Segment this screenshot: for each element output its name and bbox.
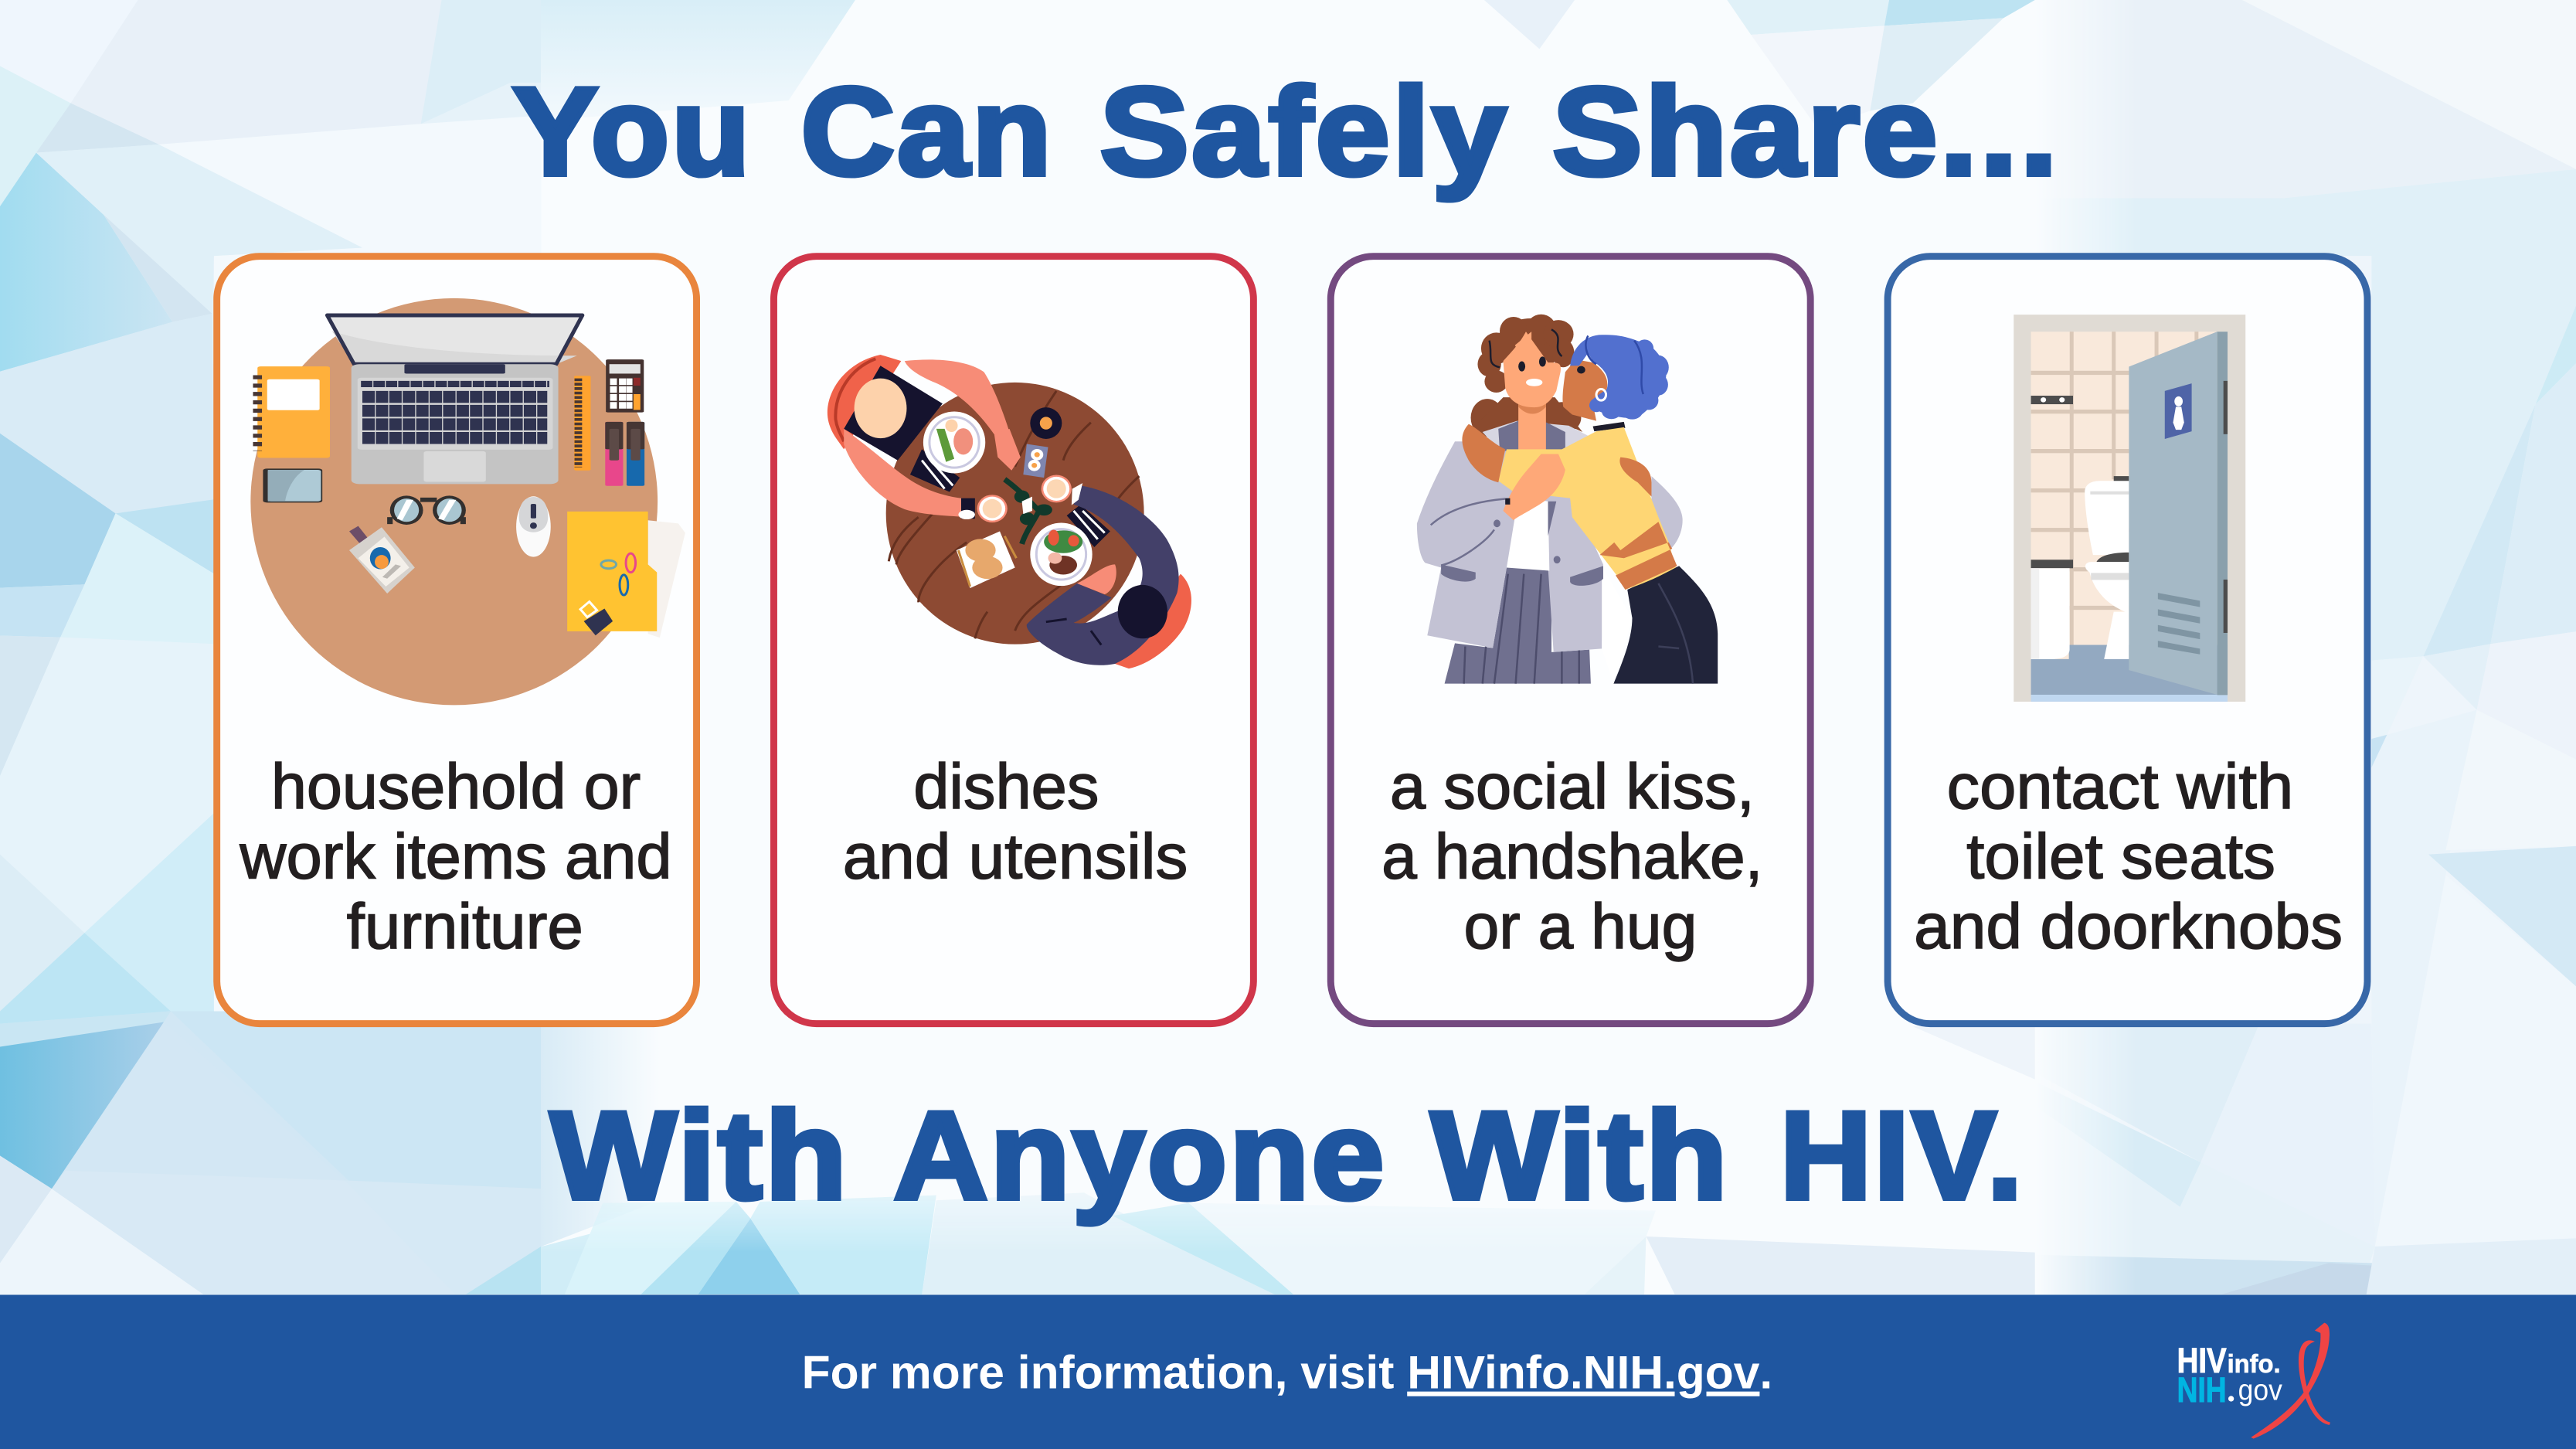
card text bbox=[239, 750, 672, 962]
card text bbox=[1914, 750, 2343, 962]
logo: HIVinfo.NIH.gov with red ribbon: info. bbox=[2228, 1350, 2281, 1379]
illustration: two people at a table bbox=[828, 355, 1191, 668]
title: You Can Safely Share...: Can bbox=[801, 63, 1054, 202]
footer band bbox=[0, 1294, 2576, 1449]
card text bbox=[843, 750, 1188, 892]
card text: dishes bbox=[913, 750, 1099, 822]
title: You Can Safely Share...: Safely bbox=[1100, 63, 1509, 202]
card text: work items and bbox=[239, 820, 672, 892]
title: You Can Safely Share... bbox=[512, 63, 2060, 202]
logo: HIVinfo.NIH.gov with red ribbon: HIV bbox=[2177, 1341, 2227, 1380]
card text: furniture bbox=[347, 890, 583, 962]
logo: HIVinfo.NIH.gov with red ribbon: gov bbox=[2238, 1374, 2283, 1407]
title: You Can Safely Share...: Share... bbox=[1552, 63, 2060, 202]
panel: dishes and utensils bbox=[773, 257, 1253, 1024]
card text bbox=[1381, 750, 1762, 962]
footer text: For more information, visit HIVinfo.NIH.gov. bbox=[802, 1346, 1772, 1399]
heading: With Anyone With HIV.: Anyone bbox=[894, 1087, 1387, 1226]
heading: With Anyone With HIV.: With bbox=[550, 1087, 849, 1226]
logo: HIVinfo.NIH.gov with red ribbon bbox=[2177, 1323, 2330, 1439]
panel: household or work items bbox=[217, 257, 697, 1024]
illustration: two people hugging bbox=[1417, 315, 1718, 684]
card text: household or bbox=[271, 750, 641, 822]
panel: social kiss, handshake or hug bbox=[1330, 257, 1810, 1024]
panel: toilet seats and doorknobs bbox=[1888, 257, 2367, 1024]
card text: and utensils bbox=[843, 820, 1188, 892]
illustration: desk from above bbox=[250, 298, 685, 705]
heading: With Anyone With HIV.: HIV. bbox=[1780, 1087, 2025, 1226]
illustration: open restroom stall door bbox=[2014, 315, 2245, 702]
card text: and doorknobs bbox=[1914, 890, 2343, 962]
title: You Can Safely Share...: You bbox=[512, 63, 753, 202]
card text: or a hug bbox=[1464, 890, 1697, 962]
card text: a social kiss, bbox=[1390, 750, 1755, 822]
heading: With Anyone With HIV.: With bbox=[1431, 1087, 1730, 1226]
card text: a handshake, bbox=[1381, 820, 1762, 892]
card text: contact with bbox=[1947, 750, 2293, 822]
card text: toilet seats bbox=[1966, 820, 2275, 892]
heading: With Anyone With HIV. bbox=[550, 1087, 2025, 1226]
logo: HIVinfo.NIH.gov with red ribbon: NIH bbox=[2177, 1370, 2227, 1410]
